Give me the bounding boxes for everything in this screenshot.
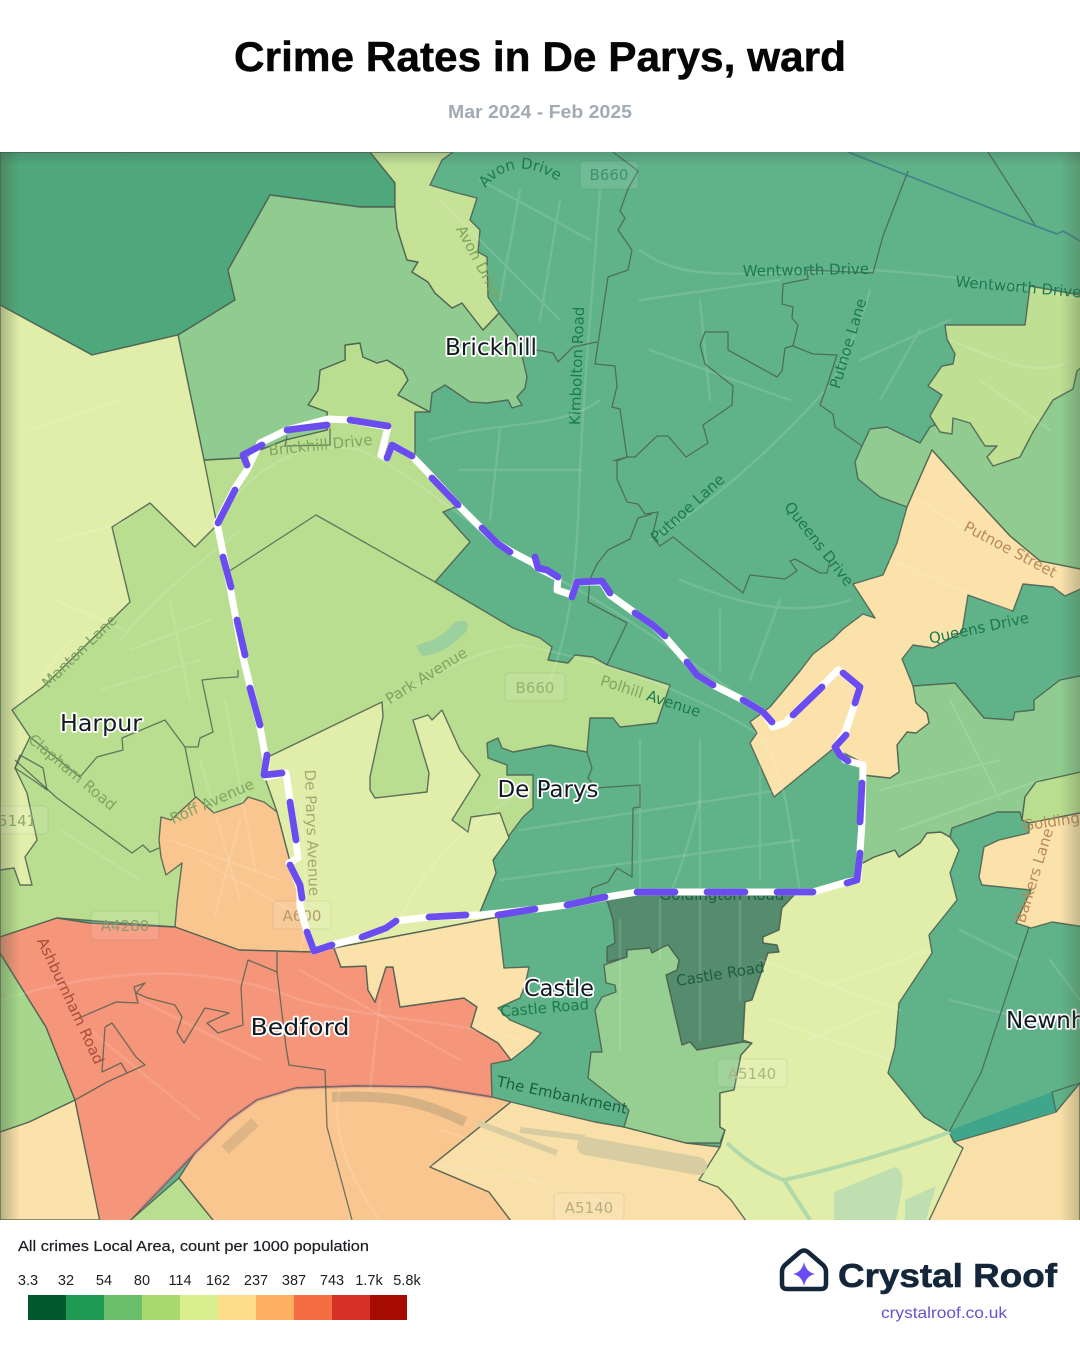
label: Avon Drive south: Avon Drive — [452, 222, 507, 303]
teal canal strip — [950, 1092, 1056, 1141]
fill regions — [0, 152, 1080, 1225]
label: Castle Road dark area: Castle Road — [675, 958, 766, 990]
boundary: north waterway — [848, 152, 1080, 241]
region: Brickhill light green — [178, 195, 527, 460]
label: Putnoe Street: Putnoe Street — [961, 518, 1060, 582]
road number shields — [0, 161, 787, 1221]
boundary: Bedford to river — [75, 1073, 127, 1100]
label: Manton Lane: Manton Lane — [38, 611, 121, 692]
map edge vignette — [0, 152, 1080, 1220]
region: lower lime wedge — [132, 1178, 212, 1220]
shield: B660 north — [580, 161, 638, 189]
region: Avon Drive lime — [370, 152, 499, 330]
place: Brickhill: Brickhill — [445, 335, 537, 361]
label: Goldington Road central: Goldington Road — [660, 886, 784, 904]
ward outline white — [217, 419, 863, 951]
shield: A600: A600 — [283, 907, 321, 925]
shield: A4280 — [91, 911, 159, 940]
shield: A5141 — [0, 806, 48, 834]
region: bottom cream band — [430, 1083, 1080, 1225]
street name labels — [30, 158, 1080, 1114]
river band: grey channel — [478, 1123, 585, 1153]
boundary: Queens Drive network — [613, 457, 830, 593]
shield: A600 — [273, 901, 331, 929]
ward outline purple dashes — [218, 420, 862, 951]
shield: B660 north: B660 — [590, 166, 628, 184]
legend tick values: 80 — [134, 1273, 150, 1289]
river band: pale channel through lime — [727, 1132, 950, 1220]
shield: A4280: A4280 — [101, 917, 149, 935]
boundary: Wentworth to Putnoe — [782, 171, 908, 346]
legend title: All crimes Local Area, count per 1000 population — [18, 1239, 369, 1255]
shield: B660 centre: B660 — [516, 679, 554, 697]
website url: crystalroof.co.uk — [881, 1305, 1008, 1322]
label: Ashburnham Road: Ashburnham Road — [33, 935, 108, 1067]
river band: grey water lozenge — [586, 1146, 698, 1166]
region: main lime west and park — [0, 305, 670, 952]
boundary: north-east canal corner — [988, 152, 1035, 225]
boundary: Park north arc — [228, 515, 435, 582]
region: south Castle light green — [588, 945, 752, 1143]
shield: B660 centre — [505, 673, 565, 701]
region: north-east light green — [855, 364, 1080, 570]
subtitle: date range: Mar 2024 - Feb 2025 — [448, 102, 632, 122]
label: Queens Drive north: Queens Drive — [780, 498, 857, 590]
legend tick values: 114 — [168, 1273, 192, 1289]
label: Wentworth Drive centre: Wentworth Drive — [743, 260, 869, 280]
region: far-west pale lime — [0, 305, 217, 885]
legend tick values: 3.3 — [18, 1273, 38, 1289]
river and canal strips — [140, 621, 1056, 1220]
boundary: Kimbolton to Putnoe network — [595, 152, 862, 457]
region: top-left dark green — [0, 152, 395, 355]
label: Queens Drive east: Queens Drive — [927, 609, 1031, 648]
legend tick values: 162 — [206, 1273, 230, 1289]
label: Polhill Avenue: Polhill Avenue — [598, 672, 703, 721]
legend tick values: 387 — [282, 1273, 306, 1289]
boundary: Brickhill east spur — [517, 335, 597, 362]
tan patch south of Bedford — [225, 1122, 255, 1150]
boundary: Bedford interior box — [102, 1023, 145, 1073]
legend — [18, 1239, 421, 1320]
muted river edge along Bedford — [140, 1086, 492, 1210]
region: De Parys Avenue pale lime — [264, 702, 509, 952]
region: Bedford salmon — [0, 918, 511, 1222]
boundary: Harpur south — [185, 747, 195, 797]
boundary: Bedford interior south — [277, 972, 352, 1220]
label: Wentworth Drive east: Wentworth Drive — [955, 273, 1080, 301]
shield: A5140 south: A5140 — [565, 1199, 613, 1217]
boundary: Harpur inner — [30, 670, 238, 777]
boundary: Newnham divide — [949, 927, 1029, 1132]
street network — [0, 180, 1080, 1220]
label: Park Avenue: Park Avenue — [382, 644, 471, 708]
map base: medium green areas — [0, 152, 1080, 1220]
label: Barkers Lane: Barkers Lane — [1011, 826, 1057, 925]
label: The Embankment: The Embankment — [494, 1072, 629, 1118]
label: De Parys Avenue: De Parys Avenue — [301, 769, 323, 896]
boundary: Brickhill Drive bracket — [285, 428, 330, 446]
extra administrative boundary lines — [15, 152, 1080, 1220]
legend colour scale — [28, 1295, 407, 1320]
place: Castle: Castle — [524, 976, 594, 1002]
label: Putnoe Lane south: Putnoe Lane — [647, 470, 728, 546]
region: south of river peach — [179, 1086, 514, 1225]
label: Brickhill Drive: Brickhill Drive — [268, 431, 373, 459]
region: Castle cream — [334, 917, 541, 1060]
region: Roff Avenue peach — [159, 797, 311, 952]
legend tick values: 1.7k — [355, 1273, 383, 1289]
label: Castle Road west: Castle Road — [499, 995, 590, 1021]
label: Putnoe Lane north: Putnoe Lane — [826, 296, 870, 391]
legend tick values: 743 — [320, 1273, 344, 1289]
icon: house with star — [782, 1250, 826, 1289]
region: Barkers Lane cream — [979, 812, 1080, 928]
boundary: De Parys inner — [587, 752, 640, 897]
label: Kimbolton Road: Kimbolton Road — [566, 306, 588, 425]
boundary: Clapham Road — [15, 760, 159, 853]
boundary: Newnham lower — [1052, 1083, 1080, 1112]
region: east light green — [859, 675, 1080, 865]
choropleth map panel — [0, 152, 1080, 1220]
label: Avon Drive north: Avon Drive — [480, 158, 560, 188]
river band: tan south of Bedford — [332, 1097, 465, 1122]
logo: Crystal Roof — [782, 1250, 1058, 1322]
legend tick values — [18, 1273, 421, 1289]
place: Harpur: Harpur — [60, 711, 143, 737]
legend tick values: 54 — [96, 1273, 112, 1289]
title: Crime Rates in De Parys, ward — [234, 33, 846, 80]
legend tick values: 32 — [58, 1273, 74, 1289]
region: left of Bedford light green — [0, 953, 75, 1132]
label: Clapham Road: Clapham Road — [25, 730, 120, 814]
region: north-east lime — [928, 286, 1080, 466]
shield: A5140 south — [554, 1193, 624, 1221]
region: central A5140 pale lime — [699, 832, 963, 1225]
logo wordmark: Crystal Roof — [838, 1257, 1058, 1294]
boundary: Bedford interior north — [79, 952, 277, 1043]
shield: A5140 centre — [717, 1059, 787, 1087]
shield: A5140 centre: A5140 — [728, 1065, 776, 1083]
place name labels — [60, 335, 1080, 1041]
lake in the park — [416, 621, 468, 656]
region: lower-left cream — [0, 1100, 100, 1220]
ward boundary: white line with purple dashes — [217, 419, 863, 951]
lake shapes in lime — [834, 1167, 936, 1220]
boundary: Clapham finger — [15, 755, 47, 790]
label: Roff Avenue: Roff Avenue — [167, 775, 257, 828]
region: Putnoe Street cream — [750, 450, 1080, 797]
place: Bedford: Bedford — [250, 1015, 350, 1041]
legend tick values: 5.8k — [393, 1273, 421, 1289]
place: De Parys: De Parys — [498, 777, 598, 803]
boundary: Putnoe south — [588, 514, 652, 665]
region: east lime corner — [1022, 771, 1080, 823]
region: Castle Road darkest green — [607, 892, 797, 1050]
legend tick values: 237 — [244, 1273, 268, 1289]
